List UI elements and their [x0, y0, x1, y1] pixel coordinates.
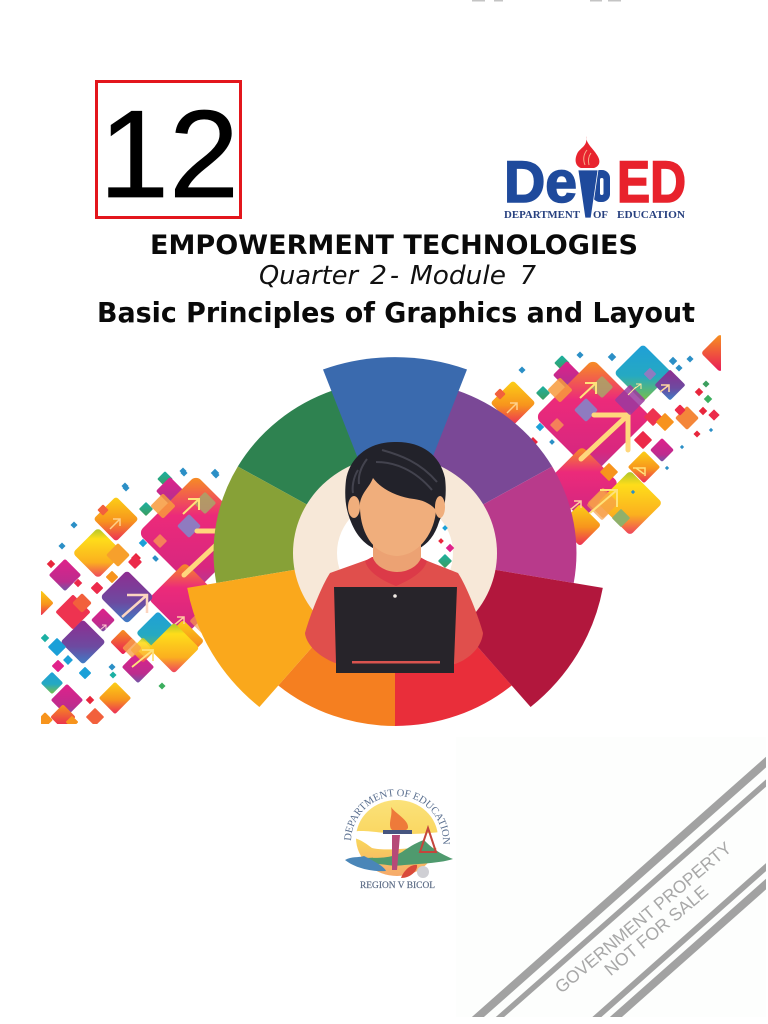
- logo: Region V Bicol: [344, 789, 453, 891]
- person: shirt: [305, 558, 483, 664]
- wheel: orange segment: [278, 553, 395, 726]
- stamp: government property: GOVERNMENT PROPERTY: [551, 838, 736, 997]
- logo: Region V Bicol: DEPARTMENT OF EDUCATION: [344, 789, 450, 844]
- person: hair back: [345, 442, 446, 549]
- title: EMPOWERMENT TECHNOLOGIES: [150, 230, 638, 261]
- wheel: crimson raised segment: [395, 553, 603, 707]
- stamp: government property: [472, 756, 766, 1017]
- module title: Basic Principles of Graphics and Layout: [97, 297, 695, 329]
- person: face: [360, 478, 436, 556]
- wheel: olive segment: [214, 466, 395, 583]
- subtitle: quarter and module: Quarter: [259, 261, 360, 291]
- wheel: cream ring: [293, 456, 497, 650]
- person: collar: [365, 557, 427, 586]
- laptop: red bar: [352, 661, 440, 664]
- subtitle: quarter and module: 2: [370, 261, 387, 291]
- wheel: purple segment: [395, 390, 552, 553]
- person: neck: [373, 540, 421, 572]
- logo: DepED: ED: [617, 150, 686, 215]
- pattern: left diamond cluster: [41, 468, 222, 724]
- laptop: [334, 587, 457, 673]
- wheel: blue raised segment: [323, 357, 467, 553]
- logo: DepED: De: [504, 150, 577, 215]
- logo: DepED: EDUCATION: [617, 210, 685, 221]
- person with laptop: [305, 442, 483, 673]
- subtitle: quarter and module: 7: [520, 261, 536, 291]
- wheel: magenta segment: [395, 466, 576, 583]
- pattern: right diamond cluster: [490, 334, 739, 546]
- laptop: camera dot: [393, 594, 397, 598]
- logo: Region V Bicol: REGION V BICOL: [360, 881, 435, 891]
- subtitle: quarter and module: Module: [410, 261, 506, 291]
- stamp: government property: NOT FOR SALE: [600, 881, 712, 980]
- grade number box: 12: [99, 86, 239, 224]
- person: hair sheen: [353, 450, 437, 493]
- logo: DepED: DEPARTMENT: [504, 210, 580, 221]
- wheel: yellow raised segment: [187, 553, 395, 707]
- subtitle: quarter and module: [259, 261, 536, 291]
- colour wheel: [187, 357, 603, 726]
- faint top edge marks: [472, 0, 621, 2]
- logo: DepED: OF: [593, 210, 608, 221]
- subtitle: quarter and module: -: [390, 261, 399, 291]
- wheel: red segment: [395, 553, 512, 726]
- wheel: white centre: [337, 498, 453, 608]
- person: ears: [348, 496, 360, 518]
- logo: DepED: [504, 136, 686, 221]
- wheel: green segment: [238, 390, 395, 553]
